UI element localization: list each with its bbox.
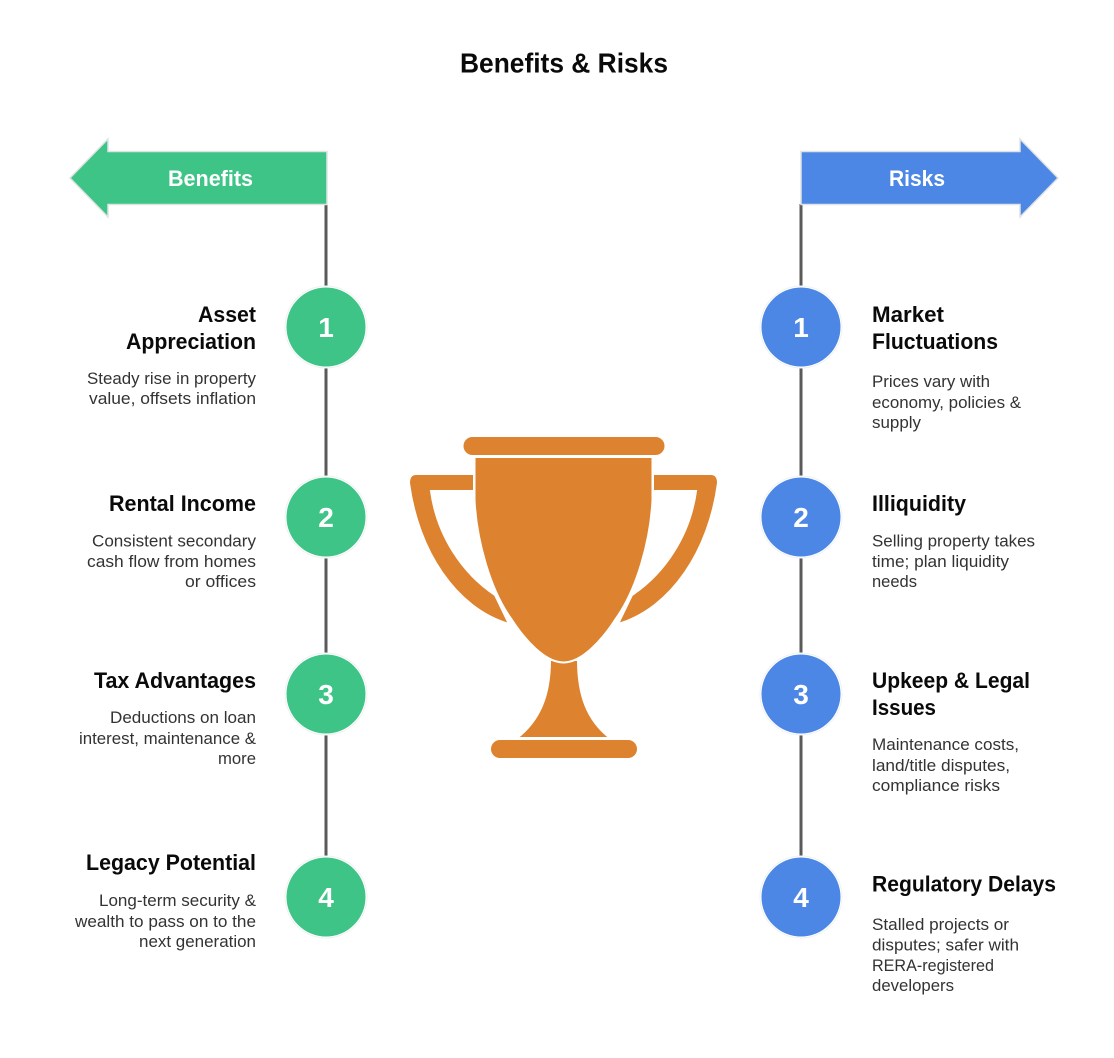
risk 1: market fluctuations: economy, policies & [872, 393, 1021, 412]
risk 1: market fluctuations [760, 286, 1021, 432]
connector line: risks [800, 204, 802, 900]
benefit 4: legacy potential: next generation [139, 932, 256, 951]
benefit 3: tax advantages: Tax Advantages [94, 668, 256, 693]
risk 3: upkeep and legal issues: Upkeep & Legal [872, 668, 1030, 693]
title: Benefits & Risks [460, 48, 668, 78]
benefit 2: rental income: or offices [185, 572, 256, 591]
risk 4: regulatory delays: Stalled projects or [872, 915, 1009, 934]
risk 3: upkeep and legal issues: land/title disputes, [872, 756, 1010, 775]
risk 4: regulatory delays: developers [872, 976, 954, 995]
arrow: benefits: Benefits [168, 166, 253, 191]
risk 1: market fluctuations: Fluctuations [872, 329, 998, 354]
arrow: risks: Risks [889, 166, 945, 191]
risk 1: market fluctuations: supply [872, 413, 922, 432]
benefit 4: legacy potential: wealth to pass on to the [74, 912, 256, 931]
risk 4: regulatory delays: RERA-registered [872, 956, 994, 975]
risk 2: illiquidity [760, 476, 1035, 591]
benefit 4: legacy potential: Legacy Potential [86, 850, 256, 875]
arrow: risks [801, 139, 1058, 217]
benefit 3: tax advantages [79, 653, 367, 768]
risk 4: regulatory delays: disputes; safer with [872, 936, 1019, 954]
risk 2: illiquidity: 2 [793, 502, 809, 533]
benefit 2: rental income: cash flow from homes [87, 552, 256, 571]
benefit 2: rental income: Consistent secondary [92, 532, 257, 550]
benefit 2: rental income: Rental Income [109, 491, 256, 516]
risk 1: market fluctuations: Market [872, 302, 944, 327]
risk 2: illiquidity: Selling property takes [872, 532, 1035, 550]
benefit 3: tax advantages: more [218, 749, 256, 768]
icon: trophy [409, 436, 718, 759]
benefit 1: asset appreciation: Steady rise in property [87, 369, 257, 388]
connector line: benefits [324, 204, 328, 900]
arrow: benefits [70, 139, 327, 217]
risk 3: upkeep and legal issues: 3 [793, 679, 809, 710]
risk 3: upkeep and legal issues: Issues [872, 695, 936, 720]
risk 2: illiquidity: time; plan liquidity [872, 552, 1010, 571]
benefit 3: tax advantages: interest, maintenance & [79, 729, 256, 748]
benefit 1: asset appreciation: Asset [198, 302, 256, 327]
benefit 4: legacy potential: 4 [318, 882, 334, 913]
benefit 1: asset appreciation [87, 286, 367, 408]
benefit 4: legacy potential: Long-term security & [99, 891, 256, 910]
benefit 1: asset appreciation: 1 [318, 312, 334, 343]
benefit 3: tax advantages: 3 [318, 679, 334, 710]
risk 1: market fluctuations: Prices vary with [872, 372, 990, 391]
risk 2: illiquidity: Illiquidity [872, 491, 966, 516]
benefit 1: asset appreciation: Appreciation [126, 329, 256, 354]
risk 4: regulatory delays: 4 [793, 882, 809, 913]
risk 2: illiquidity: needs [872, 572, 917, 591]
benefit 4: legacy potential [74, 850, 367, 951]
benefit 2: rental income [87, 476, 367, 591]
risk 3: upkeep and legal issues [760, 653, 1030, 795]
risk 1: market fluctuations: 1 [793, 312, 809, 343]
risk 3: upkeep and legal issues: Maintenance costs, [872, 735, 1019, 754]
risk 4: regulatory delays [760, 856, 1056, 995]
risk 3: upkeep and legal issues: compliance risks [872, 776, 1000, 795]
benefit 1: asset appreciation: value, offsets inflation [89, 389, 256, 408]
benefit 3: tax advantages: Deductions on loan [110, 708, 256, 727]
benefit 2: rental income: 2 [318, 502, 334, 533]
risk 4: regulatory delays: Regulatory Delays [872, 872, 1056, 896]
